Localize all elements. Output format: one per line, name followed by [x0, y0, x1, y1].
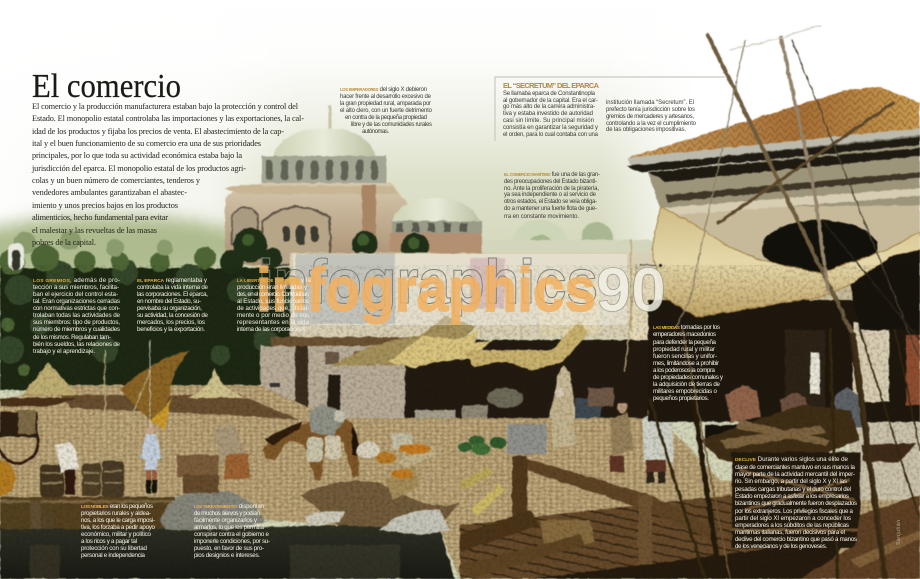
text: declive: mayor parte de la actividad mercantil del imper-	[735, 471, 855, 478]
text: las medidas: a los poderosos la compra	[653, 367, 716, 374]
watermark: infographics	[256, 256, 596, 325]
text: el eparca	[137, 277, 209, 333]
text: las medidas: propiedad rural y militar	[653, 346, 715, 353]
text: los terratenientes	[194, 503, 270, 559]
horse with load	[263, 405, 359, 480]
text: los gremios: tal. Eran organizaciones cerradas	[33, 298, 120, 305]
text: los nobles: personal e independencia	[81, 552, 146, 559]
text: los terratenientes: fácilmente organizarlos y	[194, 517, 258, 524]
text: las medidas: emperadores macedonios	[653, 331, 716, 338]
panel: el Secretum del eparca: casi sin límite. Su principal misión	[503, 118, 594, 124]
text: los emperadores: en contra de la pequeña propiedad	[345, 115, 427, 121]
intro text: El comercio y la producción manufacturera estaban bajo la protección y control del	[32, 102, 299, 111]
watermark: infographics	[258, 248, 598, 317]
text: los emperadores: la gran propiedad rural, amparada por	[340, 101, 431, 107]
text: comercio marítimo: rra en constante movimiento.	[504, 214, 579, 220]
text: los emperadores	[340, 87, 433, 135]
text: los terratenientes: de muchos siervos y podían	[194, 510, 261, 517]
text: los emperadores: hacer frente al desarrollo excesivo de	[340, 94, 432, 100]
text: declive: clase de comerciantes mantuvo en sus manos la	[735, 464, 856, 471]
Hagia Sophia	[225, 105, 482, 265]
panel: el Secretum del eparca: controlando a la vez el cumplimiento	[606, 121, 697, 127]
text: la libertad de comercio: producción eran limitadas y	[237, 284, 308, 291]
text: declive: por los extranjeros. Los privilegios fiscales que a	[735, 508, 854, 515]
panel: el Secretum del eparca: Se llamaba eparca de Constantinopla	[503, 91, 596, 97]
text: los emperadores: el alto clero, con un fuerte detrimento	[340, 108, 433, 114]
watermark: 90	[596, 256, 666, 325]
panel: el Secretum del eparca: consistía en garantizar la seguridad y	[503, 125, 598, 131]
text: el eparca: su actividad, la concesión de	[137, 312, 209, 319]
text: declive: partir del siglo XI empezaron a conceder los	[735, 515, 851, 522]
text: el eparca: mercados, los precios, los	[137, 319, 205, 326]
text: declive: pesadas cargas tributarias y el duro control del	[735, 486, 851, 493]
text: la libertad de comercio: representantes en la vida	[237, 319, 310, 326]
intro text: ital y el buen funcionamiento de su comercio era una de sus prioridades	[32, 139, 261, 148]
text: las medidas: LAS MEDIDAS tomadas por los	[653, 324, 720, 331]
text: comercio marítimo: no. Ante la proliferación de la piratería,	[504, 186, 599, 192]
text: declive	[735, 456, 857, 550]
text: comercio marítimo: des preocupaciones del Estado bizantí-	[504, 179, 597, 185]
text: los nobles: propietarios rurales y aldea-	[81, 510, 151, 517]
intro text: idad de los productos y fijaba los precios de venta. El abastecimiento de la cap-	[32, 127, 284, 136]
intro text: vendedores ambulantes garantizaban el abastec-	[32, 188, 187, 197]
text: los terratenientes: conspirar contra el gobierno e	[194, 531, 270, 538]
text: la libertad de comercio: des, en el comercio. Controlaban	[237, 291, 310, 298]
text: el eparca: las corporaciones. El eparca,	[137, 291, 208, 298]
title: El comercio	[32, 68, 181, 105]
text: los emperadores: autónomas.	[362, 129, 389, 135]
text: los terratenientes: puesto, en favor de sus pro-	[194, 545, 264, 552]
left trees	[0, 228, 429, 390]
text: el eparca: pervisaba su organización,	[137, 305, 202, 312]
produce crates and melons	[356, 424, 547, 516]
cobbled ground	[0, 385, 920, 579]
panel: el Secretum del eparca	[495, 77, 725, 141]
text: declive: declive del comercio bizantino que pasó a manos	[735, 536, 857, 543]
text: la libertad de comercio: LA LIBERTAD DE COMERCIO y la	[237, 277, 312, 284]
barrels and merchants	[40, 424, 250, 497]
text: declive: rio. Sin embargo, a partir del siglo X y XI las	[735, 478, 847, 485]
text: los gremios: sus miembros: tipo de productos,	[33, 319, 120, 326]
intro text: imiento y unos precios bajos en los productos	[32, 201, 178, 210]
text: declive: Estado empezaron a asfixiar a los empresarios	[735, 493, 849, 500]
intro text: alimenticios, hecho fundamental para evitar	[32, 213, 168, 222]
text: los gremios: trolaban todas las actividades de	[33, 312, 121, 319]
right moored boats	[700, 405, 920, 579]
text: los terratenientes: LOS TERRATENIENTES disponían	[194, 503, 265, 510]
intro text: jurisdicción del eparca. El monopolio estatal de los productos agri-	[31, 164, 246, 173]
text: comercio marítimo: otros estados, el Estado se veía obliga-	[504, 199, 597, 205]
panel: el Secretum del eparca: el orden, para lo cual contaba con una	[503, 132, 599, 138]
ship masts and rigging	[625, 25, 920, 579]
text: los gremios: tección a sus miembros, facilita-	[33, 284, 119, 291]
text: las medidas	[653, 324, 724, 402]
dark workshop interior	[648, 300, 920, 447]
text: los gremios: LOS GREMIOS, además de pro-	[33, 277, 120, 284]
text: los terratenientes: armarlos, lo que les permitía	[194, 524, 265, 531]
text: declive: bizantinos que gradualmente fueron desplazados	[735, 500, 857, 507]
text: los gremios: ban el ejercicio del control esta-	[33, 291, 118, 298]
panel: el Secretum del eparca: gremios de mercaderes y artesanos,	[606, 114, 694, 120]
text: las medidas: mes, limitándose a prohibir	[653, 360, 719, 367]
text: las medidas: de propiedades comunales y	[653, 374, 724, 381]
text: los gremios	[33, 277, 121, 355]
text: el eparca: EL EPARCA reglamentaba y	[137, 277, 208, 284]
illustrator credit: Sanjulián	[896, 520, 902, 545]
text: comercio marítimo: do a mantener una fuerte flota de gue-	[504, 206, 597, 212]
paint mottling	[0, 265, 920, 579]
market stall area	[330, 316, 655, 422]
panel: el Secretum del eparca: al gobernador de la capital. Era el car-	[503, 98, 598, 104]
text: declive: de los venecianos y de los genoveses.	[735, 543, 827, 550]
text: los nobles: nos, a los que le carga imposi-	[81, 517, 155, 524]
panel: el Secretum del eparca: de las obligaciones impositivas.	[606, 127, 686, 133]
text: el eparca: en nombre del Estado, su-	[137, 298, 201, 305]
text: los nobles: LOS NOBLES eran los pequeños	[81, 503, 153, 510]
text: los emperadores: LOS EMPERADORES del siglo X debieron	[340, 87, 427, 93]
panel: el Secretum del eparca: institución llamada “Secretum”. El	[606, 100, 694, 106]
figures in centre	[552, 387, 674, 483]
panel: el Secretum del eparca: EL “SECRETUM” DEL EPARCA	[503, 81, 600, 90]
text: comercio marítimo: ya sea independiente o al servicio de	[504, 192, 597, 198]
text: los gremios: bién los sueldos, las relaciones de	[33, 341, 121, 348]
distant green hills	[0, 215, 660, 275]
text: los terratenientes: imponerle condiciones, por su-	[194, 538, 270, 545]
intro text: el malestar y las revueltas de las masas	[32, 226, 157, 235]
dock and water	[0, 490, 455, 579]
text: comercio marítimo	[504, 172, 600, 220]
text: los nobles: económico, militar y político	[81, 531, 152, 538]
text: la libertad de comercio	[237, 277, 312, 333]
text: los gremios: número de miembros y cualidades	[33, 326, 120, 333]
intro text: colas y un buen número de comerciantes, tenderos y	[32, 176, 201, 185]
text: los gremios: trabajo y el aprendizaje.	[33, 348, 95, 355]
panel: el Secretum del eparca: prefecto tenía jurisdicción sobre los	[606, 107, 695, 113]
text: declive: DECLIVE Durante varios siglos una élite de	[735, 456, 849, 463]
text: los gremios: de los mismos. Regulaban tam-	[33, 334, 111, 341]
text: las medidas: pequeños propietarios.	[653, 395, 709, 402]
text: los nobles: tiva, los forzaba a pedir apoyo	[81, 524, 156, 531]
text: la libertad de comercio: mente o por medio de sus	[237, 312, 309, 319]
town buildings	[260, 253, 666, 418]
text: las medidas: para defender la pequeña	[653, 339, 717, 346]
tent stalls and cart	[0, 340, 246, 496]
text: los gremios: con normativas estrictas que con-	[33, 305, 120, 312]
text: declive: marítimas italianas, fueron decisivos para el	[735, 529, 845, 536]
text: los emperadores: libre y de las comunidades rurales	[351, 122, 432, 128]
text: el eparca: beneficios y la exportación.	[137, 326, 205, 333]
boat on the shore, centre	[460, 456, 860, 579]
panel: el Secretum del eparca: go más alto de la carrera administra-	[503, 104, 595, 110]
text: la libertad de comercio: al Estado, sus funcionarios	[237, 298, 309, 305]
text: los nobles	[81, 503, 156, 559]
text: la libertad de comercio: de actividades que, oficial-	[237, 305, 309, 312]
intro text	[31, 102, 304, 247]
cream awning	[652, 207, 920, 330]
text: las medidas: fueron sencillas y unifor-	[653, 353, 717, 360]
text: los nobles: a los ricos y a pagar tal	[81, 538, 137, 545]
text: comercio marítimo: EL COMERCIO MARÍTIMO fue una de las gran-	[504, 172, 600, 178]
text: las medidas: militares empobrecidas o	[653, 388, 718, 395]
panel: el Secretum del eparca: tiva y estaba investido de autoridad	[503, 111, 593, 117]
text: el eparca: controlaba la vida interna de	[137, 284, 209, 291]
text: la libertad de comercio: interna de las corporaciones.	[237, 326, 307, 333]
intro text: principales, por lo que toda su actividad económica estaba bajo la	[32, 151, 242, 160]
text: los terratenientes: pios designios e intereses.	[194, 552, 260, 559]
intro text: Estado. El monopolio estatal controlaba las importaciones y las exportaciones, la cal-	[32, 114, 304, 123]
domed building at right with tiled roof	[627, 87, 920, 300]
text: declive: emperadores a los súbditos de las repúblicas	[735, 522, 849, 529]
intro text: pobres de la capital.	[32, 238, 96, 247]
text: los nobles: protección con su libertad	[81, 545, 148, 552]
text: las medidas: la adquisición de tierras de	[653, 381, 721, 388]
